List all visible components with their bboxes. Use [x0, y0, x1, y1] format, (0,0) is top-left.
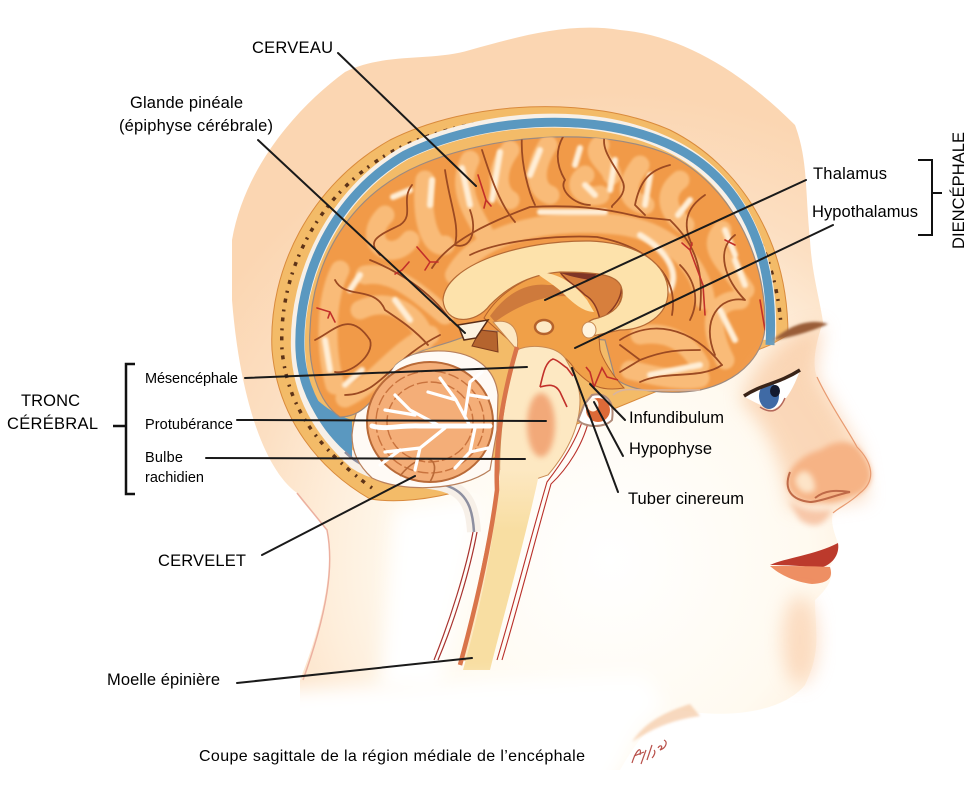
label: Protubérance: Protubérance — [145, 417, 233, 433]
pineal region — [458, 320, 498, 352]
lower fade — [270, 675, 665, 790]
cerebellum — [367, 362, 493, 482]
posterior dura double red — [434, 532, 477, 660]
signature — [632, 740, 666, 764]
lower lip — [770, 566, 831, 584]
label: Thalamus: Thalamus — [813, 165, 887, 183]
ventricle wedge — [558, 270, 602, 280]
label: CERVELET: CERVELET — [158, 552, 246, 570]
label: DIENCÉPHALE: DIENCÉPHALE — [949, 132, 968, 249]
upper lip — [770, 543, 838, 568]
nostril — [788, 472, 850, 502]
label: Infundibulum: Infundibulum — [629, 409, 724, 427]
neck back edge — [297, 493, 330, 680]
label: Moelle épinière: Moelle épinière — [107, 671, 220, 689]
face features — [632, 322, 871, 742]
eye — [745, 370, 800, 410]
nose — [787, 442, 871, 503]
chin shading — [782, 595, 818, 685]
nose profile edge — [817, 377, 871, 513]
skull base and pituitary — [578, 389, 700, 426]
jaw shading — [632, 704, 700, 742]
blue cistern — [303, 385, 352, 457]
brainstem and spinal cord — [434, 321, 618, 670]
bracket: tronc cérébral — [113, 364, 135, 494]
gyri light folds — [328, 145, 745, 398]
label: Bulbe: Bulbe — [145, 450, 183, 466]
label: CERVEAU: CERVEAU — [252, 39, 333, 57]
label: Mésencéphale: Mésencéphale — [145, 371, 238, 387]
red dorsal band — [460, 347, 517, 665]
label: Tuber cinereum: Tuber cinereum — [628, 490, 744, 508]
nose highlight — [795, 471, 815, 493]
interthalamic adhesion — [535, 320, 553, 334]
pons stripes — [527, 393, 555, 457]
leader lines — [206, 53, 833, 683]
caption: Coupe sagittale de la région médiale de l’encéphale — [199, 748, 585, 765]
label: TRONC: TRONC — [21, 392, 80, 410]
meninges light layer — [298, 121, 769, 532]
upper thalamus shading — [490, 285, 581, 322]
cerebrum — [310, 135, 765, 417]
skull bone band — [272, 107, 788, 532]
neck white core — [380, 500, 480, 690]
label: rachidien: rachidien — [145, 470, 204, 486]
sulci dark lines — [315, 135, 745, 395]
label: CÉRÉBRAL: CÉRÉBRAL — [7, 414, 98, 433]
cerebellum halo — [352, 351, 498, 488]
label: Hypophyse: Hypophyse — [629, 440, 712, 458]
spinal cord yellow — [463, 470, 540, 670]
upper face peach shading — [740, 325, 868, 510]
corpus callosum — [443, 241, 668, 338]
posterior dura grey line — [345, 452, 474, 532]
anterior dura double red — [497, 412, 590, 660]
label: Glande pinéale: Glande pinéale — [130, 94, 243, 112]
blue cerebrospinal fluid band — [300, 122, 771, 420]
label: épiphyse cérébrale: (épiphyse cérébrale) — [119, 117, 273, 135]
head silhouette — [232, 28, 871, 770]
fornix band — [535, 272, 594, 312]
arbor vitae — [372, 372, 490, 470]
eyebrow — [773, 322, 828, 340]
lower lobe crease — [400, 459, 435, 482]
skull marrow dots — [282, 117, 781, 488]
thalamus and hypothalamus region — [484, 270, 624, 389]
label: Hypothalamus: Hypothalamus — [812, 203, 918, 221]
red aqueduct outline — [540, 359, 573, 407]
vessels — [317, 175, 765, 330]
ventricle chamber — [560, 272, 621, 320]
gyri highlights — [325, 148, 745, 385]
folia — [376, 371, 484, 473]
anterior commissure — [582, 322, 596, 338]
infundibulum zigzag — [586, 367, 618, 387]
bracket: diencéphale — [918, 160, 942, 235]
under nose shading — [788, 500, 832, 525]
